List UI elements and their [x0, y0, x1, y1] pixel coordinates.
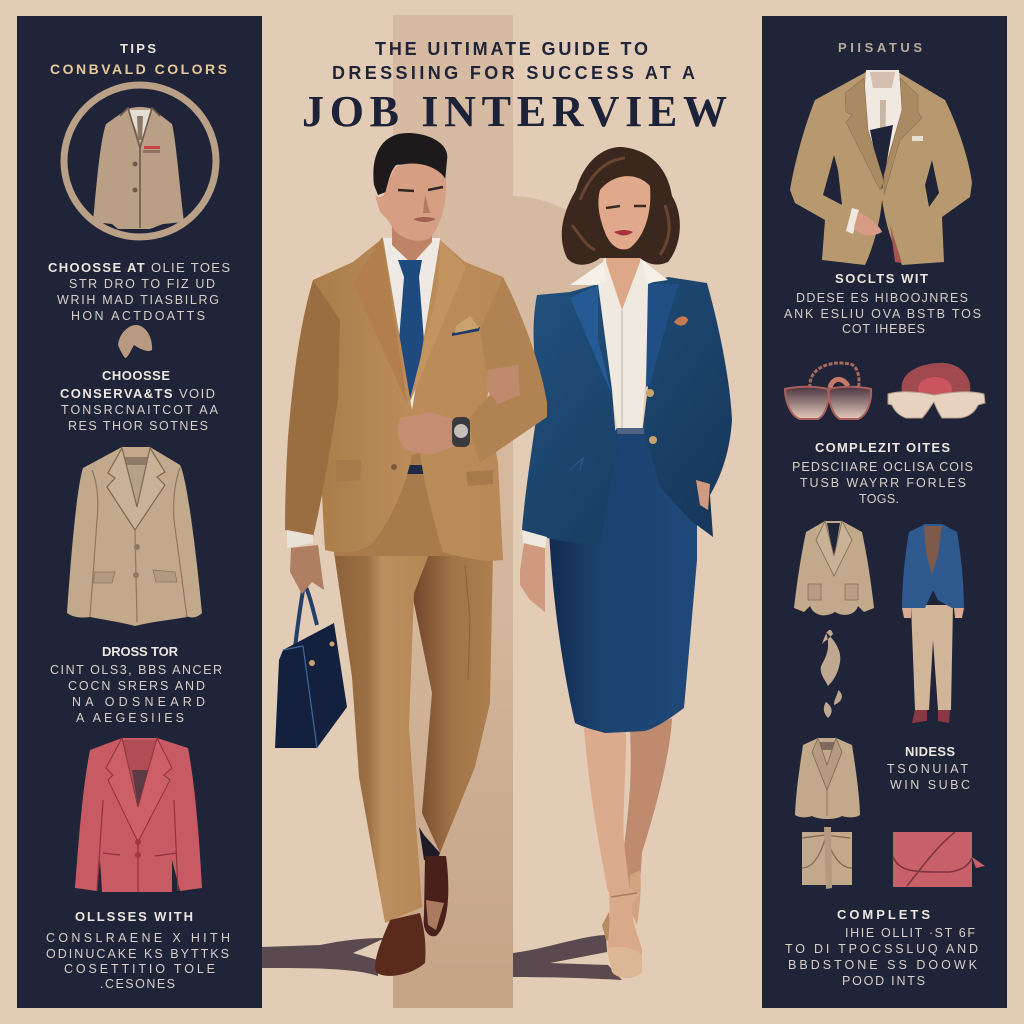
icon: pocket square — [118, 325, 152, 358]
text block: completes: TO DI TPOCSSLUQ AND — [785, 942, 978, 956]
panel: right — [762, 16, 1007, 1008]
text block: socuts wit: DDESE ES HIBOOJNRES — [796, 291, 968, 305]
text block: socuts wit — [784, 271, 981, 336]
text block: dress for: NA ODSNEARD — [72, 695, 205, 709]
text block: completes: COMPLETS — [837, 907, 930, 922]
shoes — [602, 870, 642, 978]
background stripe and circle — [393, 15, 630, 1008]
text block: choose conservative: RES THOR SOTNES — [68, 419, 208, 433]
figure: man — [275, 133, 547, 976]
text block: completes — [785, 907, 978, 988]
icon: red blazer — [75, 738, 202, 892]
text block: socuts wit: COT IHEBES — [842, 322, 925, 336]
title — [302, 39, 727, 136]
text block: nidess: WIN SUBC — [890, 778, 970, 792]
text block: complete — [792, 440, 973, 506]
hair — [373, 133, 447, 195]
left panel heading: TIPS — [120, 41, 156, 56]
left sleeve — [285, 280, 340, 537]
text block: completes: IHIE OLLIT ·ST 6F — [845, 926, 975, 940]
legs — [584, 718, 672, 905]
text block: choose at: WRIH MAD TIASBILRG — [57, 293, 219, 307]
waistband — [617, 428, 644, 434]
text block: complete: TUSB WAYRR FORLES — [800, 476, 966, 490]
text block: glasses with: COSETTITIO TOLE — [64, 962, 215, 976]
icon: jacket in ring — [64, 85, 216, 237]
text block: complete: TOGS. — [859, 492, 899, 506]
title: THE UITIMATE GUIDE TO — [375, 39, 648, 59]
text block: choose at: HON ACTDOATTS — [71, 309, 205, 323]
tan jacket — [285, 238, 547, 561]
right sleeve — [467, 277, 547, 463]
text block: complete: COMPLEZIT OITES — [815, 440, 950, 455]
icon: beige blazer — [67, 447, 202, 626]
skirt — [549, 428, 697, 733]
text block: choose at: CHOOSSE AT OLIE TOES — [48, 260, 230, 275]
text block: dress for — [50, 644, 222, 725]
right panel heading: PIISATUS — [838, 40, 922, 55]
text block: dress for: COCN SRERS AND — [68, 679, 205, 693]
text block: nidess — [887, 744, 970, 792]
text block: socuts wit: ANK ESLIU OVA BSTB TOS — [784, 307, 981, 321]
face — [375, 163, 446, 241]
icon: tan scarf — [802, 827, 852, 889]
text block: completes: BBDSTONE SS DOOWK — [788, 958, 978, 972]
jacket lapels — [570, 284, 688, 470]
hand on jacket and watch — [398, 365, 520, 455]
collar — [570, 260, 668, 285]
title: JOB INTERVIEW — [302, 87, 727, 136]
hair highlights — [572, 158, 669, 255]
text block: choose at: STR DRO TO FIZ UD — [69, 277, 215, 291]
bag — [275, 583, 347, 748]
icon: hat and pale glasses — [888, 363, 985, 418]
hands — [520, 480, 710, 612]
icon: sunglasses — [785, 363, 871, 419]
brown shoes — [375, 827, 448, 976]
shirt and neck — [383, 218, 440, 420]
text block: choose conservative — [60, 368, 219, 433]
text block: dress for: DROSS TOR — [102, 644, 179, 659]
icon: tan blazer with shirt — [790, 70, 972, 265]
face — [598, 176, 650, 249]
text block: nidess: NIDESS — [905, 744, 955, 759]
text block: choose at — [48, 260, 230, 323]
blue tie — [398, 260, 425, 400]
face features — [606, 206, 646, 236]
text block: choose conservative: TONSRCNAITCOT AA — [61, 403, 219, 417]
icon: small beige jacket — [794, 521, 874, 615]
text block: glasses with: ODINUCAKE KS BYTTKS — [46, 947, 229, 961]
blouse and neck — [596, 245, 652, 428]
shirt cuff — [287, 530, 313, 548]
jacket lapels and details — [336, 237, 493, 486]
icon: squiggle accessory — [821, 630, 842, 718]
trousers — [334, 450, 493, 923]
figure: woman — [520, 147, 732, 978]
icon: blue jacket and trousers outfit — [902, 524, 964, 723]
text block: glasses with: CONSLRAENE X HITH — [46, 931, 230, 945]
text block: completes: POOD INTS — [842, 974, 925, 988]
text block: choose conservative: CONSERVA&TS VOID — [60, 386, 215, 401]
title: DRESSIING FOR SUCCESS AT A — [332, 63, 695, 83]
panel: left tips — [17, 16, 262, 1008]
navy jacket — [522, 277, 732, 544]
text block: glasses with: .CESONES — [100, 977, 175, 991]
text block: glasses with — [46, 909, 230, 991]
floor shadows — [262, 935, 622, 980]
text block: socuts wit: SOCLTS WIT — [835, 271, 928, 286]
hair — [562, 147, 680, 265]
icon: small blazer — [795, 738, 860, 819]
face features — [398, 187, 443, 222]
left panel heading — [50, 41, 227, 77]
hand left — [290, 545, 324, 594]
text block: dress for: CINT OLS3, BBS ANCER — [50, 663, 222, 677]
text block: choose conservative: CHOOSSE — [102, 368, 170, 383]
icon: red handbag — [893, 832, 985, 887]
text block: complete: PEDSCIIARE OCLISA COIS — [792, 460, 973, 474]
text block: dress for: A AEGESIIES — [76, 711, 184, 725]
text block: glasses with: OLLSSES WITH — [75, 909, 193, 924]
text block: nidess: TSONUIAT — [887, 762, 968, 776]
left panel heading: CONBVALD COLORS — [50, 61, 227, 77]
